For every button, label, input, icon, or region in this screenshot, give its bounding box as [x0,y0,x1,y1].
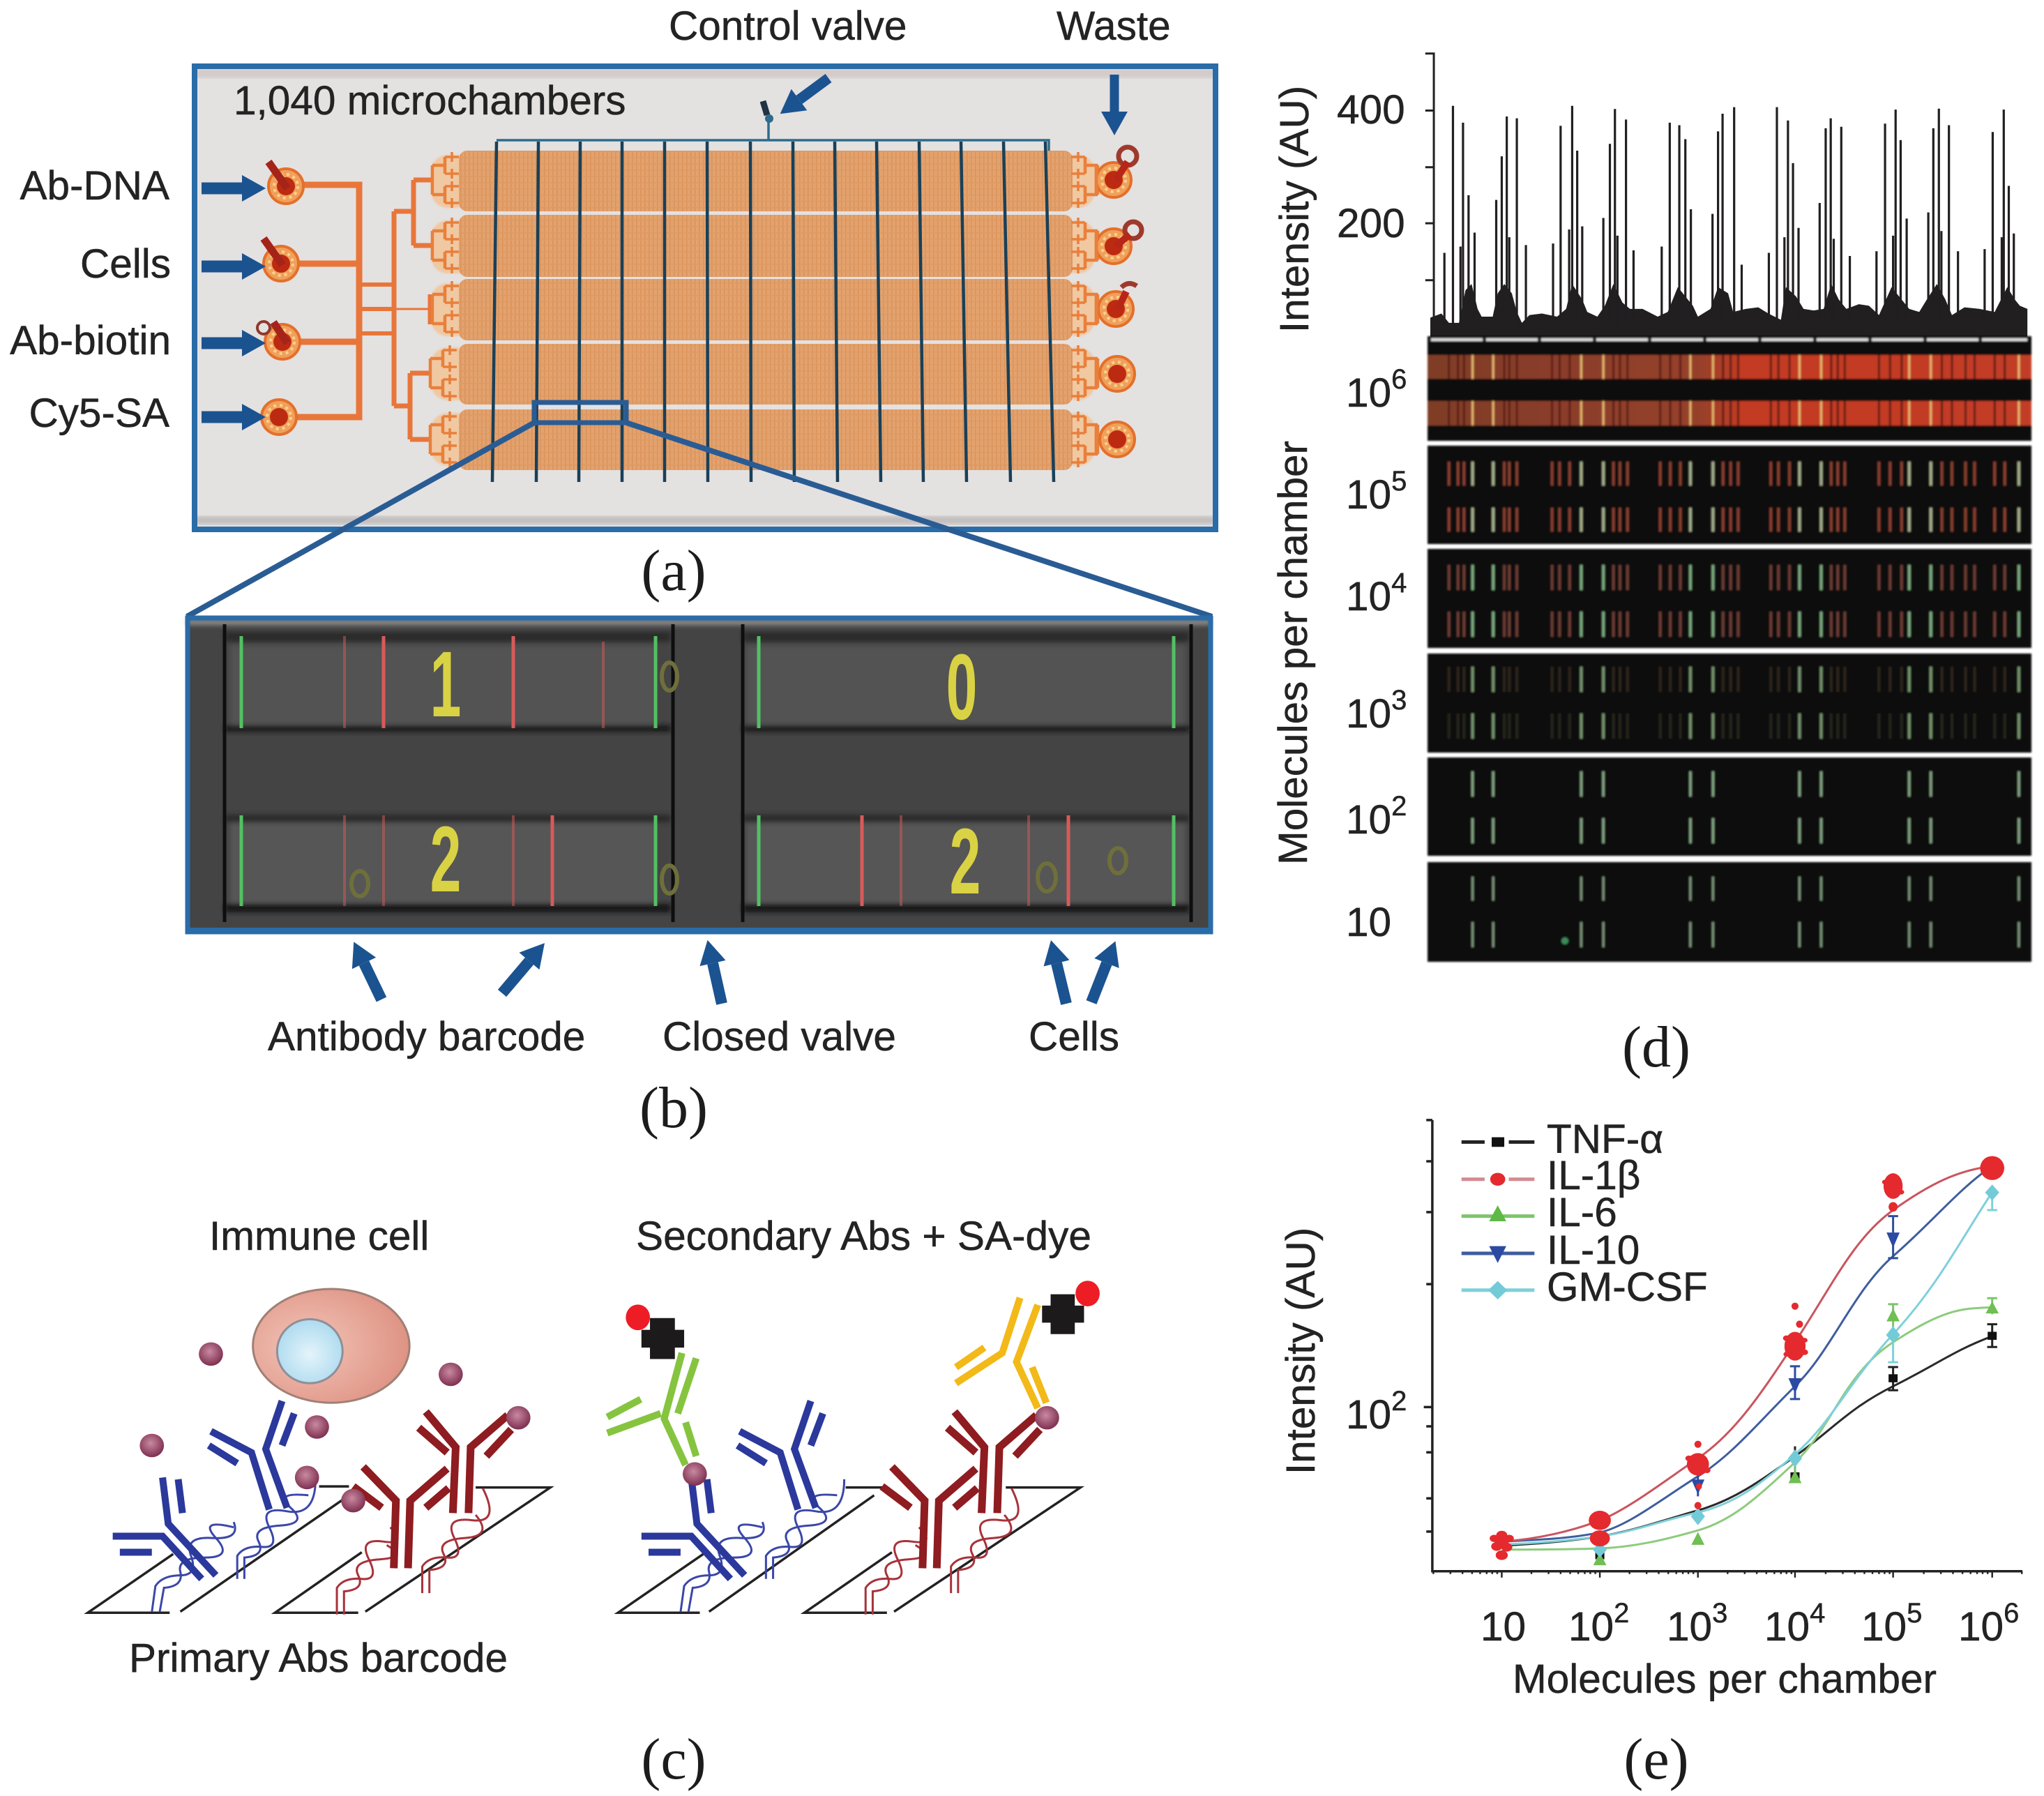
label: Immune cell: Immune cell [209,1214,429,1259]
streptavidin-dye: left [626,1304,684,1359]
row 10^6 [1428,355,2031,425]
yellow chamber numbers: 1 [430,633,461,737]
arrow: waste [1110,75,1119,112]
yellow chamber numbers: 2 [430,808,461,912]
branching trees: left [430,152,459,467]
markers: IL-1beta clusters [1490,1156,2004,1560]
error bars [1600,1192,1997,1564]
branching trees: right [1071,152,1098,467]
legend lines and markers [1462,1134,1534,1299]
panel e: y tick label: 10 [1346,1392,1391,1437]
legend labels: IL-10 [1547,1228,1640,1273]
panel e: y tick label: 2 [1391,1386,1407,1417]
arrows: antibody barcode, closed valve, cells [364,961,1107,1004]
legend labels [1547,1117,1708,1310]
substrates [88,1486,1080,1613]
right: primary antibodies [642,1401,1040,1579]
curve: IL-6 [1501,1307,1992,1550]
label: Closed valve: Closed valve [663,1014,896,1059]
frame [188,618,1211,932]
panel e: x tick labels [1481,1598,2019,1650]
label: Ab-DNA: Ab-DNA [20,163,169,209]
panel e: x tick labels: 10 [1481,1604,1526,1650]
panel d: intensity trace [1425,54,2027,338]
panel d: concentration labels: 10 [1346,900,1391,945]
green barcode markers [241,636,1174,906]
panel d: label 400: 400 [1337,87,1405,133]
streptavidin-dye: right [1042,1281,1100,1334]
caption (c): (c) [641,1727,706,1792]
caption (e): (e) [1623,1727,1689,1792]
row 10 [1473,877,2019,947]
tree halos [431,155,1095,466]
baseline signal [1430,284,2027,338]
separator dashes [1431,338,2027,341]
secondary antibody: green [607,1353,696,1465]
panel d: concentration labels: 10 [1346,797,1391,843]
panel e: x tick labels: 10 [1568,1604,1614,1650]
label: Secondary Abs + SA-dye: Secondary Abs + SA-dye [636,1214,1091,1259]
immune cell [253,1289,409,1403]
yellow chamber numbers: 0 [946,635,977,739]
panel d: concentration labels: 2 [1391,791,1407,822]
panel d: concentration labels: 10 [1346,691,1391,737]
axes [1424,1120,2022,1571]
arrows: inlet [202,188,242,417]
panel e: y label: Intensity (AU) [1278,1228,1324,1474]
panel e: x tick labels: 5 [1907,1598,1922,1629]
panel d: concentration labels: 10 [1346,370,1391,416]
panel d: concentration labels: 5 [1391,466,1407,497]
label: 1,040 microchambers: 1,040 microchambers [234,78,626,123]
panel e: x tick labels: 6 [2004,1598,2019,1629]
label: Primary Abs barcode: Primary Abs barcode [129,1636,508,1681]
panel d: barcode gel image [1428,336,2031,962]
row 10^3 [1449,667,2019,739]
curve: TNF-alpha [1501,1336,1992,1546]
control valve lines [492,101,1054,482]
label: Control valve: Control valve [669,3,907,49]
arrow: control valve [799,78,828,100]
caption (d): (d) [1622,1015,1690,1080]
panel e: dose-response chart [1424,1120,2022,1578]
panel d: label 200: 200 [1337,201,1405,246]
panel d: concentration labels: 6 [1391,364,1407,395]
left: primary antibodies [113,1401,511,1579]
cells [351,663,1126,896]
panel c: antibody schematics [88,1281,1100,1615]
label: Cy5-SA: Cy5-SA [29,391,169,436]
panel e: x tick labels: 10 [1958,1604,2004,1650]
caption (b): (b) [639,1076,708,1140]
outlet ports [1096,147,1142,457]
panel a: microfluidic chip photo [192,63,1218,532]
panel d: concentration labels: 4 [1391,568,1407,598]
inlet manifold [293,180,432,439]
markers: IL-6 [1593,1301,1999,1565]
legend labels: GM-CSF [1547,1265,1708,1310]
panel e: x tick labels: 10 [1861,1604,1907,1650]
zoom box [534,402,626,423]
chamber shading [187,619,1211,912]
markers: TNF-alpha [1596,1331,1997,1560]
walls [225,624,1191,922]
right: DNA strands [681,1479,1018,1615]
panel e: x tick labels: 3 [1712,1598,1727,1629]
panel d: y label Molecules per chamber: Molecules per chamber [1271,441,1316,865]
caption (a): (a) [641,538,706,603]
panel d: concentration labels: 3 [1391,685,1407,716]
curve: IL-1beta [1501,1166,1992,1541]
spikes [1444,106,2014,324]
frame [195,66,1216,529]
panel d: concentration labels: 10 [1346,574,1391,619]
secondary antibody: yellow [956,1298,1046,1408]
panel d: concentration labels [1346,364,1407,945]
left: DNA strands [152,1479,490,1615]
yellow chamber numbers [430,633,981,914]
panel b: fluorescence micrograph of microchambers [186,616,1213,934]
label: Waste: Waste [1057,3,1171,49]
panel d: concentration labels: 10 [1346,472,1391,518]
curve: GM-CSF [1501,1192,1992,1544]
zoom connector lines [187,423,1212,617]
chamber array [459,151,1073,470]
markers: IL-10 [1691,1232,1900,1495]
secreted protein beads [139,1342,1059,1512]
label: Ab-biotin: Ab-biotin [10,318,171,363]
panel e: x tick labels: 2 [1614,1598,1629,1629]
yellow chamber numbers: 2 [950,810,981,914]
row 10^2 [1473,771,2019,843]
panel e: x label: Molecules per chamber [1513,1657,1937,1702]
panel d: y label Intensity (AU): Intensity (AU) [1272,86,1317,333]
legend labels: TNF-α [1547,1117,1663,1162]
panel e: x tick labels: 4 [1810,1598,1825,1629]
label: Antibody barcode: Antibody barcode [268,1014,585,1059]
label: Cells: Cells [1029,1014,1119,1059]
legend labels: IL-6 [1547,1190,1617,1235]
x ticks [1433,1571,2022,1578]
markers: GM-CSF [1593,1184,1999,1557]
inlet ports [257,162,303,435]
chip background [192,63,1218,532]
label: Cells: Cells [80,241,171,287]
curve: IL-10 [1501,1166,1992,1541]
row 10^5 [1449,462,2019,531]
red barcode signals [345,636,1068,906]
axis [1425,54,1434,337]
panel e: x tick labels: 10 [1667,1604,1712,1650]
row 10^4 [1449,565,2019,637]
legend labels: IL-1β [1547,1153,1640,1198]
panel e: x tick labels: 10 [1764,1604,1810,1650]
